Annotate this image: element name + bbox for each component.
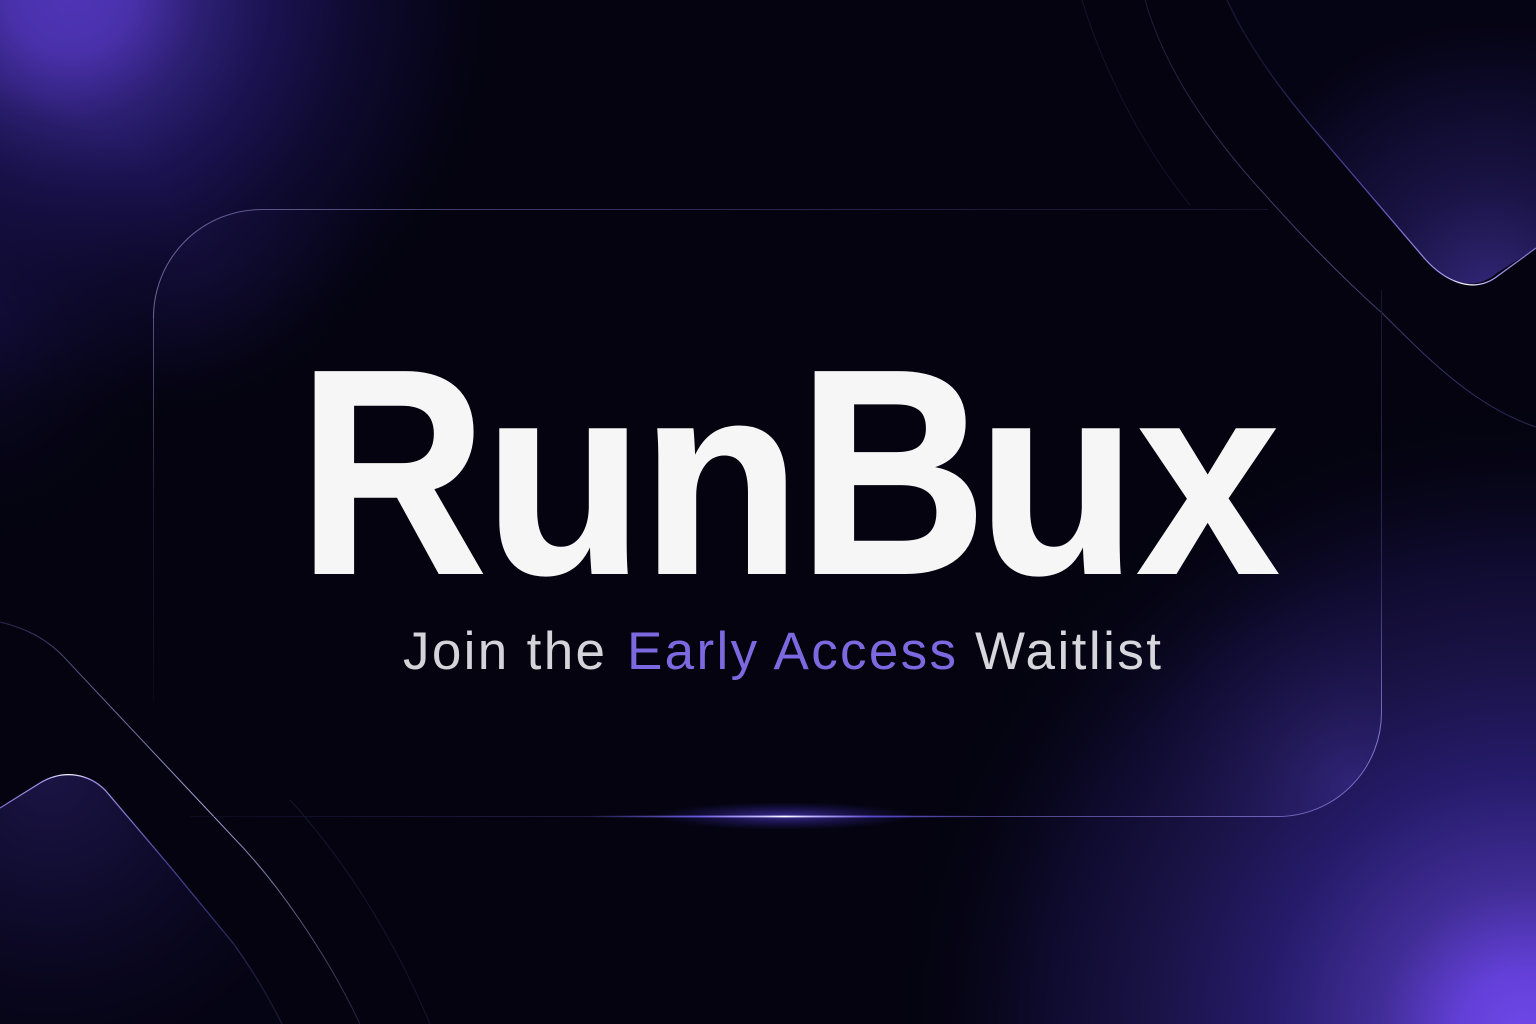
shape: bottom left ribbon [0,775,282,1024]
title: x [1137,327,1281,631]
title: u [977,327,1137,631]
panel outline: bottom edge [190,816,1278,818]
subtitle [403,622,1161,681]
subtitle: waitlist: Waitlist [975,622,1161,681]
panel corner glow [153,209,1382,817]
panel: glass card [153,209,1382,817]
curve: top right middle line [1145,0,1536,427]
curve: top right faint line [1082,0,1190,205]
panel outline: left edge [152,318,154,700]
title: B [798,309,987,635]
subtitle: early access: Early Access [627,622,956,681]
panel outline: top edge and corner [153,209,1268,318]
shape edge: top right ribbon [1227,0,1536,285]
panel outline: right edge and corner [1278,290,1382,816]
glow: top left corner [0,0,520,440]
curve: bottom left faint line [290,800,430,1024]
title: R [298,309,487,635]
shape: top right ribbon [1227,0,1536,284]
curve: bottom left middle line [0,622,360,1024]
title: u [484,327,644,631]
glow: left edge [0,80,210,560]
title: n [641,327,801,631]
shape edge: bottom left ribbon [0,775,282,1024]
subtitle: join the: Join the [403,622,605,681]
glow: bottom right corner [885,395,1536,1024]
glowing bottom line [590,802,980,830]
